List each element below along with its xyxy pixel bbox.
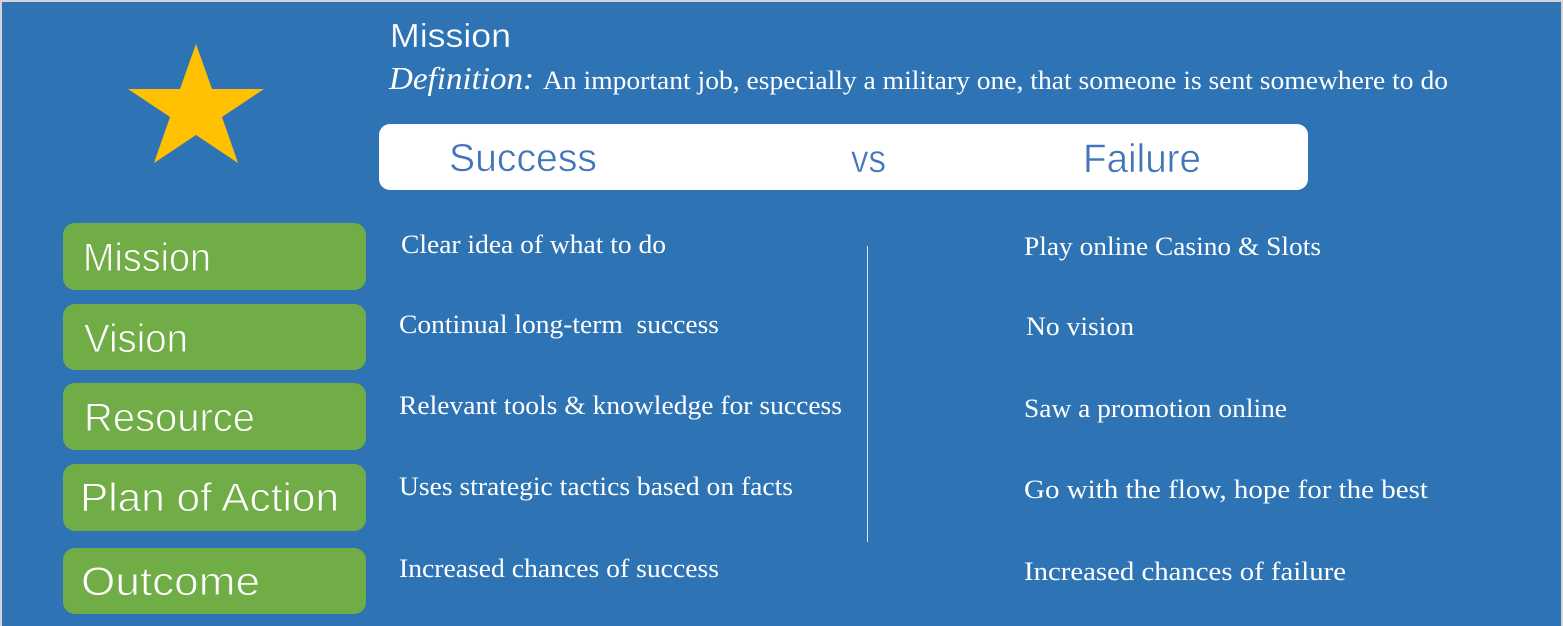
row label: Mission: Mission <box>83 236 211 280</box>
panel: success vs failure header: Failure <box>1083 137 1201 181</box>
row label: Outcome <box>63 548 366 614</box>
row label: Vision: Vision <box>84 317 188 361</box>
failure column: Saw a promotion online <box>1024 394 1287 423</box>
panel: success vs failure header <box>379 124 1308 190</box>
success column: Uses strategic tactics based on facts <box>399 472 793 501</box>
failure column: No vision <box>1026 312 1134 341</box>
failure column <box>1024 232 1429 586</box>
success column: Clear idea of what to do <box>401 230 666 259</box>
row label: Resource: Resource <box>84 396 255 440</box>
success column: Relevant tools & knowledge for success <box>399 391 842 420</box>
success column <box>399 230 842 583</box>
row label: Resource <box>63 383 366 450</box>
success column: Increased chances of success <box>399 554 719 583</box>
row label: Outcome: Outcome <box>81 560 260 604</box>
panel: success vs failure header: Success <box>449 137 597 180</box>
heading: Mission: Mission <box>390 17 511 54</box>
row label: Plan of Action <box>63 464 366 531</box>
definition text <box>388 60 1448 96</box>
row label: Vision <box>63 304 366 370</box>
failure column: Play online Casino & Slots <box>1024 232 1321 261</box>
failure column: Go with the flow, hope for the best <box>1024 475 1429 504</box>
failure column: Increased chances of failure <box>1024 557 1346 586</box>
success column: Continual long-term success <box>399 310 719 339</box>
row label: Plan of Action: Plan of Action <box>80 476 339 520</box>
definition text: Definition: <box>388 60 534 96</box>
panel: success vs failure header: vs <box>851 138 886 181</box>
definition text: An important job, especially a military one, that someone is sent somewhere to do <box>543 66 1448 95</box>
row label: Mission <box>63 223 366 290</box>
icon: gold star <box>128 44 264 163</box>
